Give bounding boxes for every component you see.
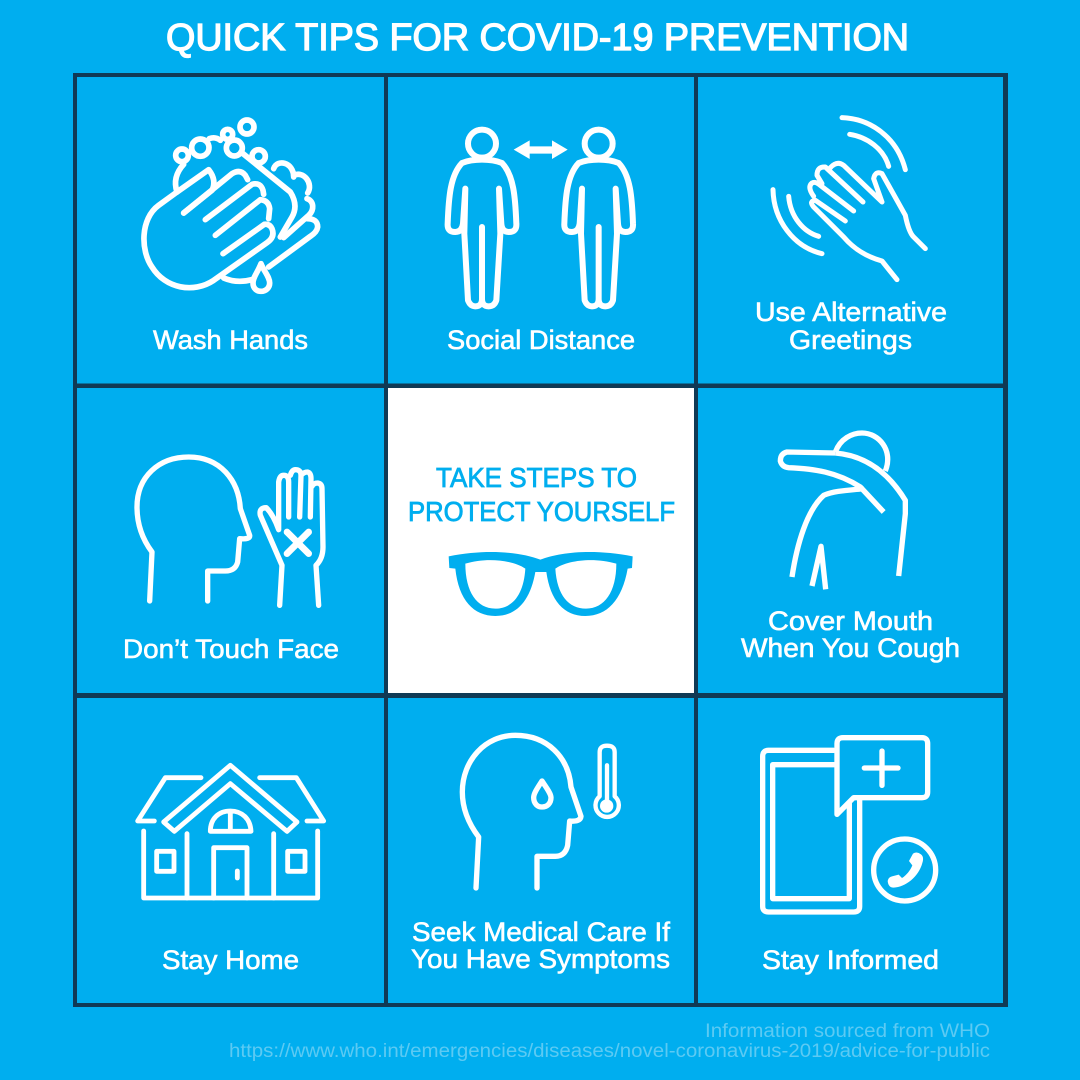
panel: seek medical care (388, 698, 694, 1003)
label line 2: Greetings (789, 325, 912, 355)
icon: head and hand (137, 457, 323, 605)
label line 2: You Have Symptoms (411, 944, 670, 974)
panel: stay home (77, 698, 384, 1003)
label line 2: When You Cough (741, 633, 960, 663)
icon: glasses (449, 552, 633, 616)
label: Stay Informed (762, 945, 939, 975)
icon: house (138, 765, 324, 898)
panel: wash hands (77, 77, 384, 384)
heading line 1: TAKE STEPS TO (436, 462, 637, 493)
grid frame (73, 73, 1008, 1007)
panel: social distance (388, 77, 694, 384)
source note: https://www.who.int/emergencies/diseases/novel-coronavirus-2019/advice-for-public (229, 1041, 990, 1062)
source note (229, 1021, 990, 1062)
panel: cover mouth (698, 388, 1003, 693)
source note: Information sourced from WHO (705, 1021, 990, 1042)
icon: two people with arrow (448, 130, 633, 306)
label: Wash Hands (153, 325, 308, 355)
title: QUICK TIPS FOR COVID-19 PREVENTION (166, 17, 909, 59)
label: Cover Mouth (768, 606, 933, 636)
icon: washing hands (144, 120, 318, 291)
icon: person coughing into elbow (780, 433, 905, 589)
icon: waving hand (773, 118, 925, 280)
label: Stay Home (162, 945, 299, 975)
label: Don’t Touch Face (123, 634, 339, 664)
panel: don't touch face (77, 388, 384, 693)
label: Social Distance (447, 325, 635, 355)
label: Seek Medical Care If (412, 917, 671, 947)
icon: head with fever and thermometer (462, 735, 619, 888)
panel: stay informed (698, 698, 1003, 1003)
heading line 2: PROTECT YOURSELF (408, 496, 675, 527)
icon: tablet, message and phone (763, 738, 936, 912)
panel: alternative greetings (698, 77, 1003, 384)
label: Use Alternative (755, 297, 947, 327)
panel: center message (388, 388, 694, 693)
